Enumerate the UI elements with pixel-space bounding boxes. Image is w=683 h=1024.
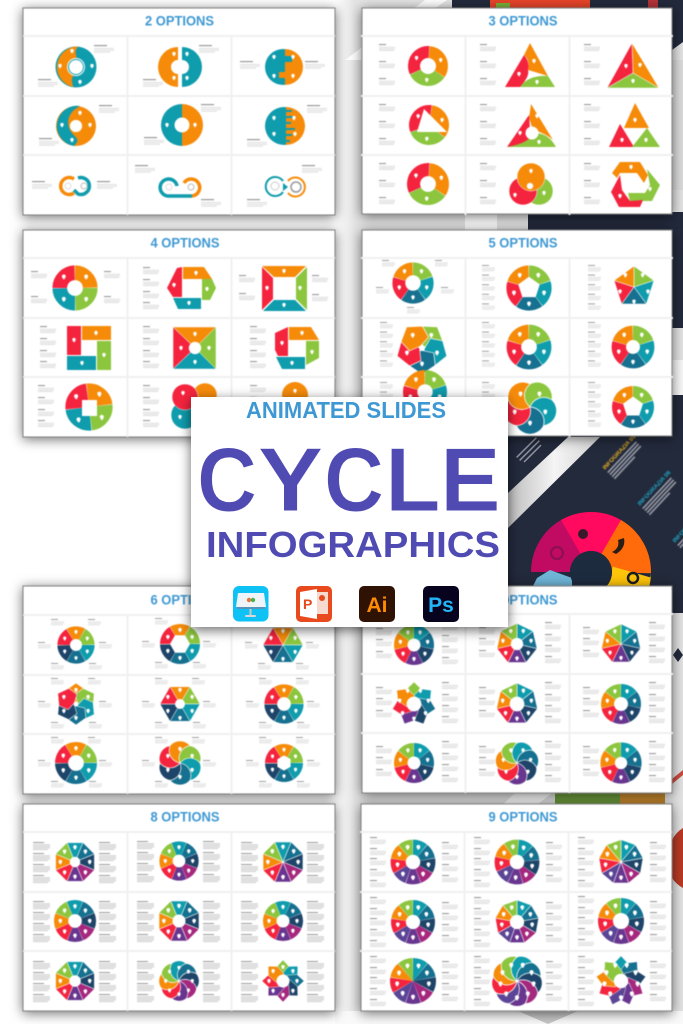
diagram: swirl flower xyxy=(142,736,216,790)
diagram: four-part ring xyxy=(31,271,120,303)
diagram: square wedges with hole xyxy=(143,326,216,369)
panel: 6 options xyxy=(23,586,335,794)
diagram: six-part ring xyxy=(38,619,112,669)
heading: 9 options: 9 OPTIONS xyxy=(488,810,558,824)
panel: central cover card xyxy=(191,397,508,627)
diagram: swirl ring xyxy=(379,163,443,204)
diagram: ring, partly hidden xyxy=(380,377,442,427)
diagram: puzzle split circle xyxy=(240,49,325,85)
diagram: hexagon frame xyxy=(143,267,216,309)
title: cycle: C xyxy=(324,430,384,531)
diagram: circle with square hole xyxy=(38,385,104,427)
diagram: octagon with hole xyxy=(137,901,220,942)
diagram: octagon wedges xyxy=(241,842,324,883)
rotated caption: infografica 06 xyxy=(637,470,681,515)
diagram: ring with pentagon hole, rounded xyxy=(588,382,649,427)
diagram: three separate triangle pieces xyxy=(584,103,660,147)
diagram: ring with hexagon hole xyxy=(142,618,216,668)
diagram: comb split circle xyxy=(247,105,327,147)
diagram: rounded ring xyxy=(578,896,666,946)
icon: photoshop xyxy=(423,586,459,622)
diagram: ring wide hole xyxy=(33,901,116,942)
diagram: hexagon with hole xyxy=(142,678,216,728)
diagram: petal flower xyxy=(380,319,451,374)
diagram: nonagon wedges xyxy=(578,837,666,887)
diagram: pentagon wedges xyxy=(588,265,654,310)
diagram: eight-part ring xyxy=(137,841,220,882)
diagram: swirl ring xyxy=(482,322,546,367)
diagram: hexagon wedges xyxy=(245,619,319,669)
heading: 2 options: 2 OPTIONS xyxy=(145,14,214,28)
rotated caption: infografica 06: INFOGRAZIA 06 xyxy=(637,470,673,507)
diagram: heptagon with hole xyxy=(479,622,561,663)
panel: 4 options xyxy=(23,230,335,437)
panel: 7 options xyxy=(361,586,673,793)
diagram: octagon with hole, lower row xyxy=(33,961,116,1002)
diagram: ring with triangle hole xyxy=(379,104,447,145)
title: cycle xyxy=(197,430,501,531)
diagram: rounded ring xyxy=(246,678,320,728)
diagram: seven-part ring xyxy=(376,623,458,664)
diagram: swirl flower xyxy=(474,952,562,1009)
icon: keynote xyxy=(233,586,268,622)
panel: 5 options xyxy=(361,230,673,440)
diagram: octagon frame xyxy=(250,326,319,369)
icon: photoshop: Ps xyxy=(428,594,454,617)
heading: 6 options: 6 OPTIONS xyxy=(150,592,220,608)
heading: 5 options: 5 OPTIONS xyxy=(488,236,558,250)
diagram: petal star xyxy=(241,960,324,1002)
diagram: centred triangle xyxy=(584,43,659,88)
diagram: ring with star hole xyxy=(246,737,320,787)
diagram: ring with star hole xyxy=(583,741,665,782)
title: cycle: E xyxy=(440,430,501,531)
heading: 7 options: 7 OPTIONS xyxy=(488,592,558,608)
diagram: half teal half orange ring xyxy=(144,104,221,146)
diagram: heptagon wedges xyxy=(583,622,665,663)
diagram: ring, partly hidden xyxy=(250,382,310,427)
diagram: five-part ring xyxy=(376,260,454,313)
heading: 4 options: 4 OPTIONS xyxy=(150,236,220,250)
diagram: ring with pentagon hole xyxy=(482,265,546,310)
panel: 9 options xyxy=(360,804,672,1011)
diagram: yin-yang swirl ring xyxy=(39,105,119,146)
diagram: interlocked circles xyxy=(480,163,553,205)
diagram: chained loops with bar xyxy=(135,165,221,207)
diagram: swirl flower xyxy=(482,378,560,440)
diagram: ring wide hole xyxy=(38,737,112,787)
heading: 8 options: 8 OPTIONS xyxy=(150,810,220,824)
heading: 3 options: 3 OPTIONS xyxy=(488,14,558,28)
icon: powerpoint: P xyxy=(303,596,312,612)
diagram: two separated half rings xyxy=(143,45,219,87)
diagram: rounded ring xyxy=(588,322,649,367)
icon: illustrator xyxy=(359,586,395,622)
diagram: three-part ring xyxy=(379,44,442,85)
diagram: full pie xyxy=(370,956,458,1006)
icon: powerpoint xyxy=(296,586,332,622)
diagram: split ring with S divider xyxy=(38,45,114,88)
dark slide: colourful donut infographic behind the cover card xyxy=(533,529,638,612)
diagram: petal flower xyxy=(38,678,112,728)
title: cycle: Y xyxy=(258,430,324,531)
diagram: swirl flower xyxy=(137,958,220,1004)
panel: 2 options xyxy=(23,8,335,215)
diagram: hexagonal loop xyxy=(584,162,660,207)
icon: illustrator: Ai xyxy=(366,594,388,617)
diagram: rounded ring xyxy=(241,901,324,942)
diagram: heptagon with wide hole xyxy=(479,682,561,723)
diagram: angled nine-part ring xyxy=(474,837,562,887)
diagram: petal star xyxy=(376,682,458,727)
title: infographics: INFOGRAPHICS xyxy=(206,524,500,565)
heading: animated slides: ANIMATED SLIDES xyxy=(246,397,446,423)
diagram: rounded heptagon ring xyxy=(376,741,458,782)
diagram: nine-part ring xyxy=(370,837,458,887)
diagram: ring with offset wedges xyxy=(370,897,458,947)
title: cycle: C xyxy=(197,430,257,531)
diagram: petal star xyxy=(578,956,666,1007)
rotated caption: infografica 05 xyxy=(602,434,646,479)
panel: 3 options xyxy=(361,8,673,215)
diagram: square frame xyxy=(239,266,328,311)
rotated caption: infografica 05: INFOGRAZIA 05 xyxy=(602,434,638,471)
diagram: nonagon with hole xyxy=(474,897,562,947)
diagram: triangle with hole xyxy=(480,104,556,147)
diagram: infinity loops xyxy=(32,178,117,195)
diagram: curved triangle xyxy=(480,43,555,87)
diagram: rounded ring xyxy=(583,682,665,723)
panel: 8 options xyxy=(23,804,335,1011)
title: cycle: L xyxy=(385,430,441,531)
diagram: overlapping circles, partly hidden xyxy=(143,383,217,429)
diagram: square pinwheel xyxy=(40,326,111,370)
diagram: swirl flower xyxy=(479,738,561,788)
diagram: octagon with small hole xyxy=(33,842,116,883)
diagram: linked circles with icons xyxy=(247,165,322,207)
